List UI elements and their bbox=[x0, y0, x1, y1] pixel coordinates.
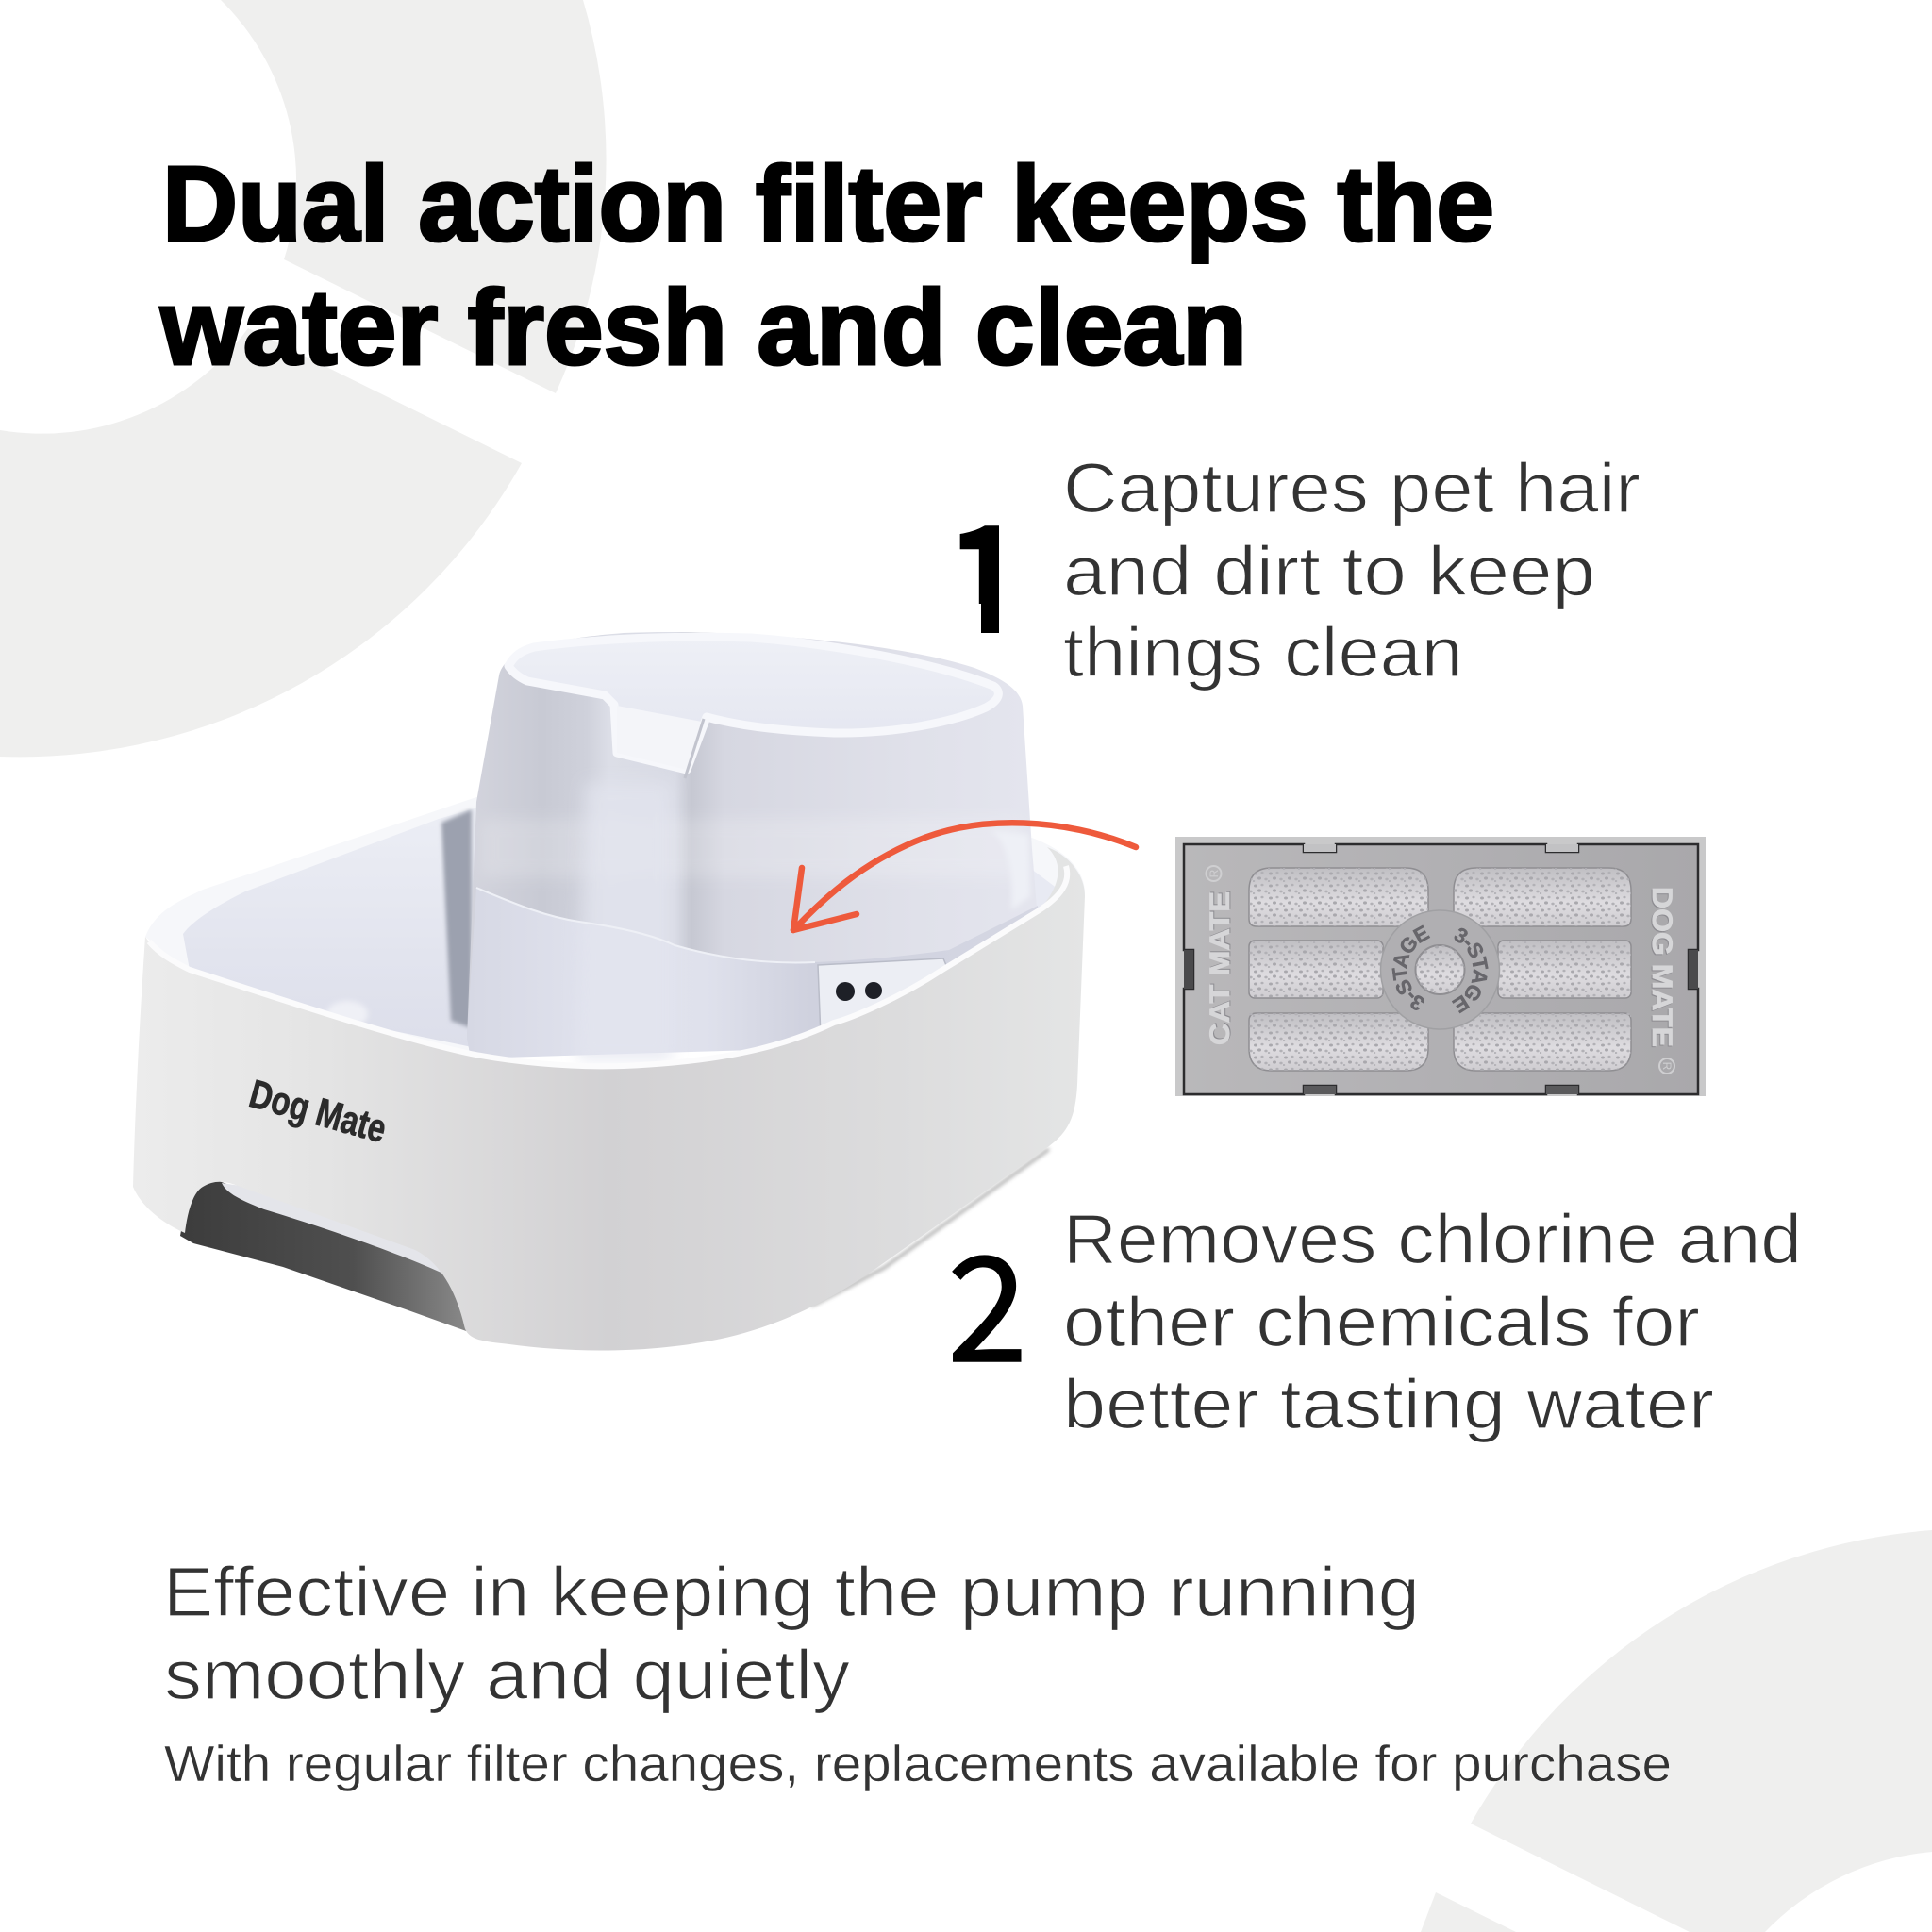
text: step 1 description bbox=[1063, 449, 1641, 691]
text: step 2 description: Removes chlorine and bbox=[1063, 1200, 1802, 1278]
text: replacement note: With regular filter changes, replacements available for purchase bbox=[164, 1736, 1672, 1792]
text: bottom statement: smoothly and quietly bbox=[164, 1636, 850, 1714]
text: bottom statement bbox=[163, 1553, 1420, 1714]
rear bowl interior and rim bbox=[145, 797, 1085, 1057]
filter label: CAT MATE: CAT MATE bbox=[1205, 891, 1236, 1045]
fountain product image bbox=[133, 632, 1085, 1351]
registered marks: R bbox=[1660, 1062, 1674, 1071]
filter frame bbox=[1175, 837, 1706, 1096]
filter cartridge image bbox=[1175, 837, 1706, 1096]
title: Dual action filter keeps the bbox=[162, 144, 1494, 263]
text: step 2 description: other chemicals for bbox=[1063, 1283, 1700, 1361]
registered marks: R bbox=[1208, 869, 1221, 877]
title: water fresh and clean bbox=[159, 268, 1247, 387]
filter windows bbox=[1249, 868, 1631, 1071]
text: bottom statement: Effective in keeping the pump running bbox=[163, 1553, 1420, 1631]
brand logo on fountain: Dog Mate bbox=[245, 1071, 391, 1151]
background: bottom-right ring shapes bbox=[1421, 1530, 1932, 1932]
title bbox=[159, 144, 1494, 387]
registered marks bbox=[1206, 866, 1674, 1074]
arrow from filter to fountain bbox=[793, 823, 1136, 930]
central tower bbox=[467, 632, 1040, 1061]
filter centre disc: 3-STAGE bbox=[1452, 928, 1489, 1013]
number 2: 2 bbox=[947, 1193, 1027, 1404]
filter centre disc bbox=[1379, 909, 1500, 1030]
text: step 1 description: and dirt to keep bbox=[1063, 532, 1595, 610]
front basin bbox=[133, 847, 1085, 1351]
background: top-left ring shapes bbox=[0, 0, 607, 757]
filter label: DOG MATE: DOG MATE bbox=[1646, 887, 1677, 1047]
text: step 1 description: Captures pet hair bbox=[1063, 449, 1641, 527]
text: step 1 description: things clean bbox=[1063, 613, 1463, 691]
number 1: 1 bbox=[946, 465, 1026, 675]
filter centre disc: 3-STAGE bbox=[1392, 924, 1430, 1010]
button box with two dots bbox=[818, 958, 953, 1038]
filter speckle texture bbox=[1249, 868, 1631, 1071]
text: step 2 description bbox=[1063, 1200, 1802, 1443]
text: step 2 description: better tasting water bbox=[1063, 1365, 1714, 1443]
